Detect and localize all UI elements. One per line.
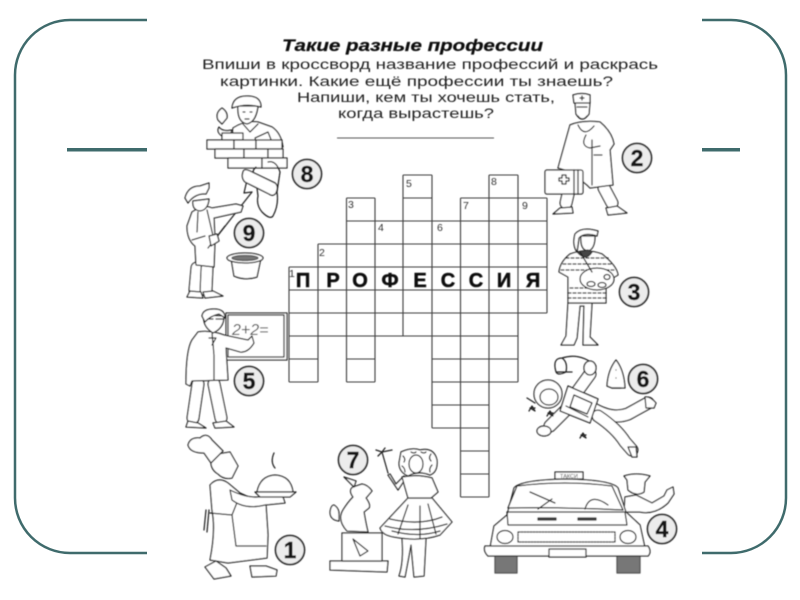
- instructions text: картинки. Какие ещё профессии ты знаешь?: [220, 73, 613, 89]
- crossword word: ПРОФЕССИЯ: С: [441, 270, 455, 292]
- number badge 2: 2: [631, 145, 643, 171]
- crossword word: ПРОФЕССИЯ: Я: [526, 270, 540, 292]
- figure: chef with dish: [188, 435, 296, 579]
- figure: taxi car: ТАКСИ: [560, 474, 578, 480]
- number badge 8: [292, 160, 322, 188]
- instructions text: [202, 56, 658, 121]
- plaster patch and paint roller: [208, 162, 280, 248]
- crossword word: ПРОФЕССИЯ: Е: [413, 270, 427, 292]
- slide frame: left bracket: [15, 20, 147, 553]
- number badge 1: 1: [284, 537, 297, 563]
- crossword word: ПРОФЕССИЯ: [296, 270, 540, 292]
- worksheet artwork: [185, 36, 676, 579]
- figure: painter: [185, 183, 243, 298]
- figure: teacher at blackboard: [186, 309, 287, 428]
- crossword word: ПРОФЕССИЯ: Р: [326, 270, 340, 292]
- title: Такие разные профессии: [282, 36, 544, 55]
- figure: astronaut: [527, 356, 656, 457]
- number badge 2: [622, 144, 652, 172]
- instructions text: Впиши в кроссворд название профессий и раскрась: [202, 56, 658, 72]
- figure: doctor: [545, 94, 627, 215]
- figure: teacher at blackboard: 2+2=: [231, 322, 268, 339]
- number badge 6: 6: [637, 366, 649, 392]
- crossword clue numbers: 1: [289, 268, 295, 280]
- crossword clue numbers: 4: [378, 222, 384, 234]
- number badge 9: [234, 218, 264, 248]
- crossword clue numbers: 9: [522, 200, 528, 212]
- crossword word: ПРОФЕССИЯ: Ф: [381, 270, 399, 292]
- instructions text: Напиши, кем ты хочешь стать,: [297, 89, 555, 105]
- icon: paint bucket: [227, 253, 263, 279]
- figure: girl with wand: [376, 448, 452, 577]
- number badge 8: 8: [301, 161, 314, 187]
- figure: artist: [559, 229, 618, 345]
- crossword clue numbers: [289, 176, 528, 280]
- number badge 5: [234, 366, 264, 396]
- crossword word: ПРОФЕССИЯ: О: [352, 270, 368, 292]
- right divider: [702, 148, 740, 152]
- crossword word: ПРОФЕССИЯ: И: [497, 270, 511, 292]
- number badge 7: [338, 446, 368, 474]
- number badge 3: 3: [628, 279, 640, 305]
- figure: dog on pedestal: [330, 477, 388, 572]
- number badge 5: 5: [243, 368, 256, 394]
- crossword word: ПРОФЕССИЯ: С: [469, 270, 483, 292]
- crossword clue numbers: 8: [491, 176, 497, 188]
- number badge 1: [276, 536, 304, 564]
- crossword clue numbers: 7: [463, 200, 469, 212]
- crossword clue numbers: 6: [437, 222, 443, 234]
- figure: taxi car: [484, 472, 650, 573]
- crossword clue numbers: 2: [319, 247, 325, 259]
- number badge 3: [620, 278, 648, 306]
- crossword grid: [289, 175, 547, 497]
- number badge 4: [648, 514, 676, 544]
- crossword clue numbers: 3: [348, 199, 354, 211]
- number badge 6: [628, 364, 658, 394]
- instructions text: когда вырастешь?: [338, 105, 494, 121]
- crossword word: ПРОФЕССИЯ: П: [296, 270, 310, 292]
- figure: taxi driver: [624, 474, 674, 513]
- left divider: [67, 148, 147, 152]
- number badge 7: 7: [347, 447, 359, 473]
- number badge 9: 9: [243, 220, 255, 246]
- slide frame: right bracket: [702, 20, 786, 553]
- number badge 4: 4: [656, 516, 669, 542]
- answer line: [337, 137, 494, 139]
- figure: bricklayer: [207, 96, 287, 168]
- crossword clue numbers: 5: [406, 178, 412, 190]
